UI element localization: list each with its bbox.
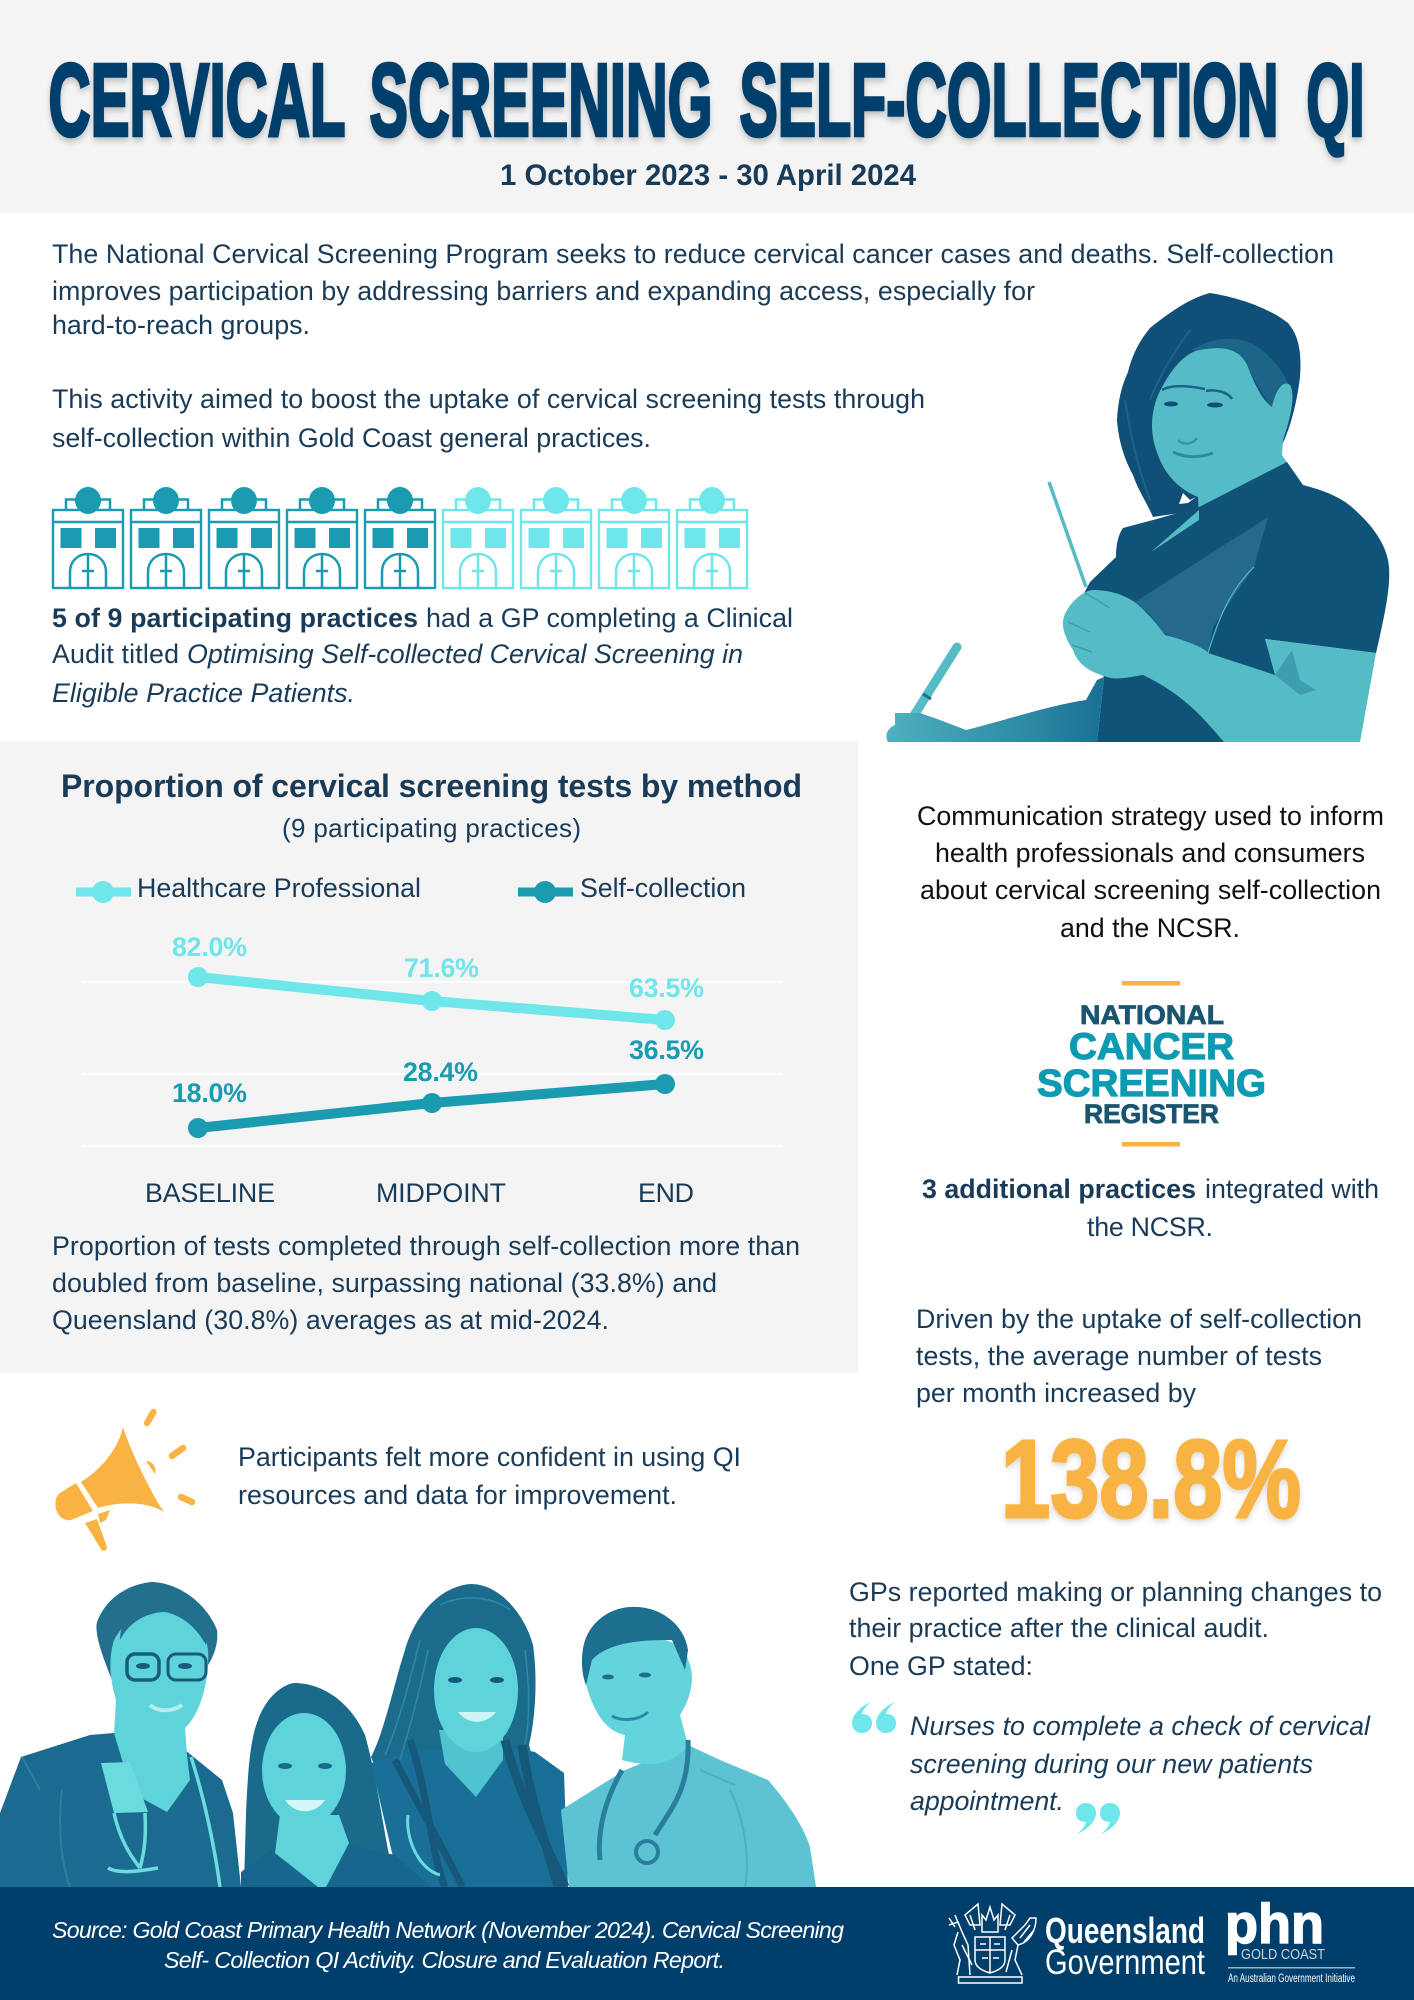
PHN Gold Coast logo: GOLD COAST: [1241, 1946, 1325, 1963]
intro text: hard-to-reach groups.: [52, 310, 310, 340]
GP quote: screening during our new patients: [910, 1749, 1313, 1779]
communication strategy text: and the NCSR.: [1060, 913, 1240, 943]
NCSR logo: [1037, 981, 1266, 1146]
icon: closing quote mark: [1076, 1803, 1120, 1834]
icon: opening quote mark: [852, 1702, 896, 1733]
line chart: MIDPOINT: [376, 1178, 506, 1208]
PHN Gold Coast logo: An Australian Government Initiative: [1228, 1973, 1355, 1985]
practices statement: Audit titled: [52, 639, 179, 669]
title: CERVICAL: [48, 42, 346, 158]
communication strategy text: about cervical screening self-collection: [920, 875, 1381, 905]
intro text: The National Cervical Screening Program seeks to reduce cervical cancer cases and deaths. Self-collection: [52, 239, 1334, 269]
tests per month statement: per month increased by: [916, 1378, 1197, 1408]
intro text: This activity aimed to boost the uptake of cervical screening tests through: [52, 384, 925, 414]
NCSR integration statement: integrated with: [1205, 1174, 1379, 1204]
practices statement: Optimising Self-collected Cervical Screening in: [187, 639, 743, 669]
NCSR logo: SCREENING: [1037, 1063, 1266, 1105]
communication strategy text: Communication strategy used to inform: [917, 801, 1384, 831]
title: QI: [1306, 42, 1364, 158]
chart commentary: [52, 1231, 800, 1335]
person 4: [561, 1607, 816, 1887]
big stat: 138.8%: 138.8%: [1001, 1418, 1301, 1541]
tests per month statement: tests, the average number of tests: [916, 1341, 1322, 1371]
date range: 1 October 2023 - 30 April 2024: [500, 159, 917, 192]
Queensland Government logo: Queensland: [1045, 1910, 1205, 1951]
panel: proportion of tests: [0, 741, 858, 1373]
photo: woman holding swab, duotone: [886, 293, 1389, 742]
icon row: 9 practices, 5 highlighted: [53, 487, 747, 588]
line chart: 18.0%: [172, 1078, 247, 1108]
GP changes statement: One GP stated:: [849, 1651, 1033, 1681]
line chart: END: [638, 1178, 694, 1208]
practices statement: had a GP completing a Clinical: [426, 603, 793, 633]
chart commentary: Queensland (30.8%) averages as at mid-2024.: [52, 1305, 609, 1335]
tests per month statement: [916, 1304, 1362, 1408]
practices statement: [52, 603, 793, 708]
Queensland Government logo: [949, 1904, 1205, 1983]
intro text: improves participation by addressing barriers and expanding access, especially for: [52, 276, 1035, 306]
NCSR integration statement: 3 additional practices: [922, 1174, 1196, 1204]
chart commentary: doubled from baseline, surpassing national (33.8%) and: [52, 1268, 717, 1298]
legend: [76, 873, 746, 903]
GP quote: appointment.: [910, 1786, 1064, 1816]
PHN Gold Coast logo: phn: [1225, 1892, 1324, 1955]
intro text: self-collection within Gold Coast general practices.: [52, 423, 651, 453]
practices statement: 5 of 9 participating practices: [52, 603, 418, 633]
legend: Self-collection: [580, 873, 746, 903]
intro text: [52, 239, 1334, 453]
chart commentary: Proportion of tests completed through self-collection more than: [52, 1231, 800, 1261]
NCSR logo: CANCER: [1069, 1026, 1234, 1067]
tests per month statement: Driven by the uptake of self-collection: [916, 1304, 1362, 1334]
line chart: 71.6%: [404, 953, 479, 983]
confidence statement: [238, 1442, 741, 1510]
GP quote: Nurses to complete a check of cervical: [910, 1711, 1371, 1741]
chart heading: Proportion of cervical screening tests by method: [61, 768, 802, 804]
header band: [0, 0, 1414, 213]
confidence statement: Participants felt more confident in using QI: [238, 1442, 741, 1472]
source citation: Self- Collection QI Activity. Closure and Evaluation Report.: [164, 1947, 725, 1973]
source citation: [52, 1917, 844, 1973]
confidence statement: resources and data for improvement.: [238, 1480, 677, 1510]
communication strategy text: [917, 801, 1384, 943]
photo: four health professionals, duotone: [0, 1582, 816, 1887]
source citation: Source: Gold Coast Primary Health Network (November 2024). Cervical Screening: [52, 1917, 844, 1943]
Queensland Government logo: Government: [1045, 1943, 1205, 1982]
GP quote: [852, 1702, 1371, 1834]
GP changes statement: [849, 1577, 1382, 1681]
GP changes statement: GPs reported making or planning changes to: [849, 1577, 1382, 1607]
NCSR logo: REGISTER: [1084, 1099, 1219, 1129]
line chart: [145, 932, 704, 1208]
person 1: [0, 1582, 241, 1887]
line chart: BASELINE: [145, 1178, 275, 1208]
PHN Gold Coast logo: [1225, 1892, 1355, 1985]
person 2: [241, 1683, 431, 1887]
line chart: 63.5%: [629, 973, 704, 1003]
legend: Healthcare Professional: [137, 873, 421, 903]
title: SCREENING: [370, 42, 712, 158]
NCSR integration statement: the NCSR.: [1087, 1212, 1213, 1242]
line chart: 28.4%: [403, 1057, 478, 1087]
NCSR logo: NATIONAL: [1080, 1000, 1224, 1030]
icon: megaphone: [55, 1412, 192, 1551]
chart subheading: (9 participating practices): [282, 813, 581, 843]
communication strategy text: health professionals and consumers: [935, 838, 1365, 868]
footer band: [0, 1887, 1414, 2000]
GP changes statement: their practice after the clinical audit.: [849, 1613, 1269, 1643]
NCSR integration statement: [922, 1174, 1379, 1242]
crest: [949, 1904, 1036, 1983]
person 3: [371, 1584, 568, 1887]
practices statement: Eligible Practice Patients.: [52, 678, 355, 708]
line chart: 36.5%: [629, 1035, 704, 1065]
line chart: 82.0%: [172, 932, 247, 962]
title: [48, 42, 1364, 158]
